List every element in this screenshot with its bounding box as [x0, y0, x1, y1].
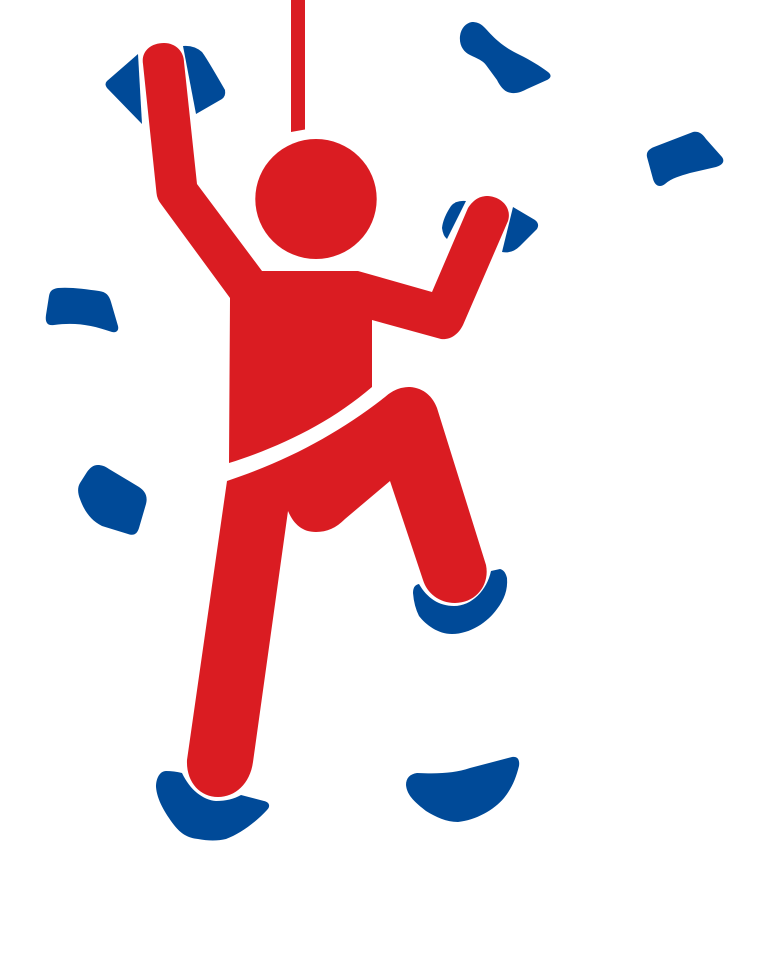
torso and arms	[143, 43, 509, 463]
icon: climbing holds	[46, 22, 723, 840]
legs	[187, 387, 487, 797]
icon: climber figure	[143, 0, 509, 797]
head	[255, 139, 377, 259]
rope	[291, 0, 305, 132]
